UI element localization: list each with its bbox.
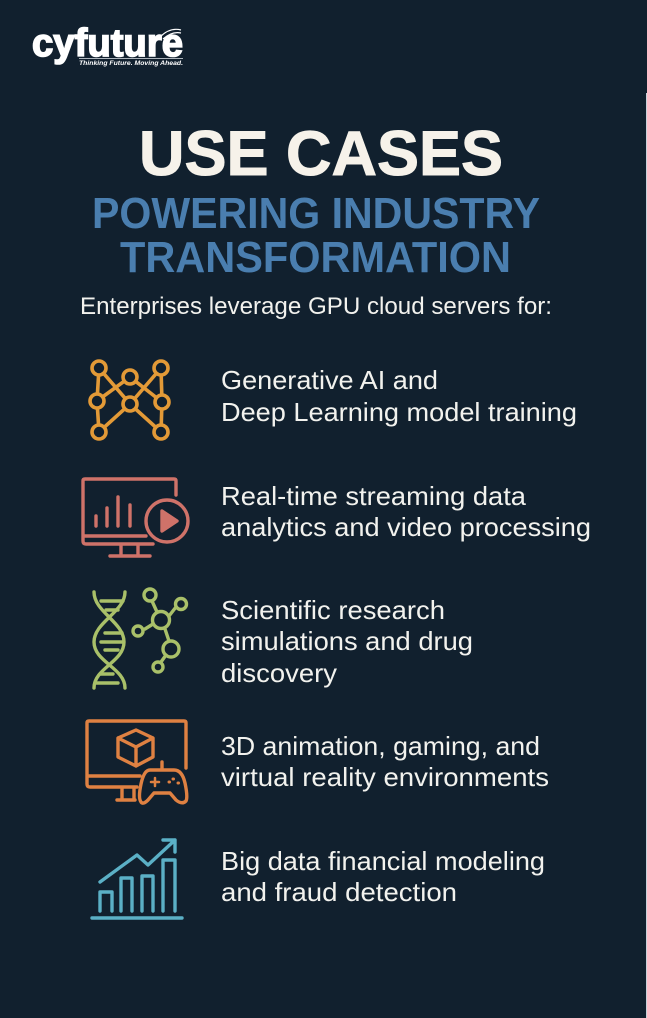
icon: monitor with cube and game controller bbox=[87, 721, 187, 803]
text: 3d animation: 3D animation, gaming, and bbox=[221, 731, 540, 761]
item: 3d animation bbox=[87, 721, 549, 803]
item: streaming analytics bbox=[83, 479, 591, 556]
logo: cyfuture: Thinking Future. Moving Ahead. bbox=[79, 61, 183, 67]
text: big data finance bbox=[221, 846, 545, 907]
item: generative ai bbox=[90, 361, 577, 439]
icon: dna and molecule bbox=[94, 589, 186, 688]
text: streaming analytics: analytics and video processing bbox=[221, 512, 591, 542]
text: generative ai: Deep Learning model training bbox=[221, 397, 577, 427]
icon: monitor with play button bbox=[83, 479, 188, 556]
item: scientific research bbox=[94, 589, 473, 688]
item: big data finance bbox=[92, 840, 545, 918]
text: generative ai bbox=[221, 365, 577, 427]
icon: neural network bbox=[90, 361, 169, 439]
text: scientific research: discovery bbox=[221, 658, 337, 688]
text: generative ai: Generative AI and bbox=[221, 365, 438, 395]
subtitle: powering industry transformation: POWERING INDUSTRY bbox=[92, 189, 540, 238]
subtitle: powering industry transformation bbox=[92, 189, 540, 282]
title: use cases: USE CASES bbox=[139, 119, 503, 189]
text: scientific research: simulations and drug bbox=[221, 626, 473, 656]
icon: rising bar chart bbox=[92, 840, 182, 918]
text: scientific research bbox=[221, 595, 473, 688]
text: 3d animation: virtual reality environments bbox=[221, 762, 549, 792]
logo: cyfuture: cyfuture bbox=[32, 22, 183, 65]
subtitle: powering industry transformation: TRANSFORMATION bbox=[120, 233, 511, 282]
text: streaming analytics bbox=[221, 481, 591, 542]
intro text: Enterprises leverage GPU cloud servers for: bbox=[80, 293, 552, 320]
text: scientific research: Scientific research bbox=[221, 595, 445, 625]
text: streaming analytics: Real-time streaming data bbox=[221, 481, 527, 511]
text: big data finance: and fraud detection bbox=[221, 877, 457, 907]
text: 3d animation bbox=[221, 731, 549, 792]
text: big data finance: Big data financial modeling bbox=[221, 846, 545, 876]
